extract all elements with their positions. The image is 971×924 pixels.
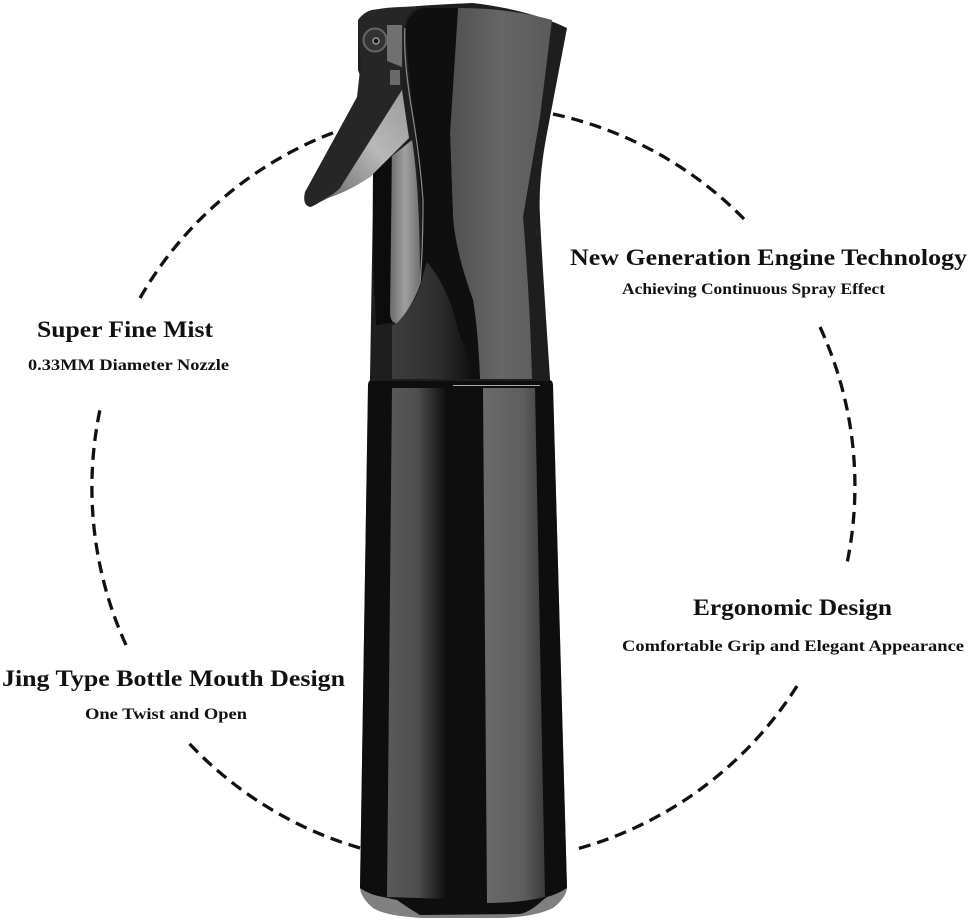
nozzle block bbox=[358, 7, 420, 70]
lower grey zone bbox=[392, 262, 475, 379]
callout: super fine mist bbox=[28, 317, 229, 374]
callout: ergonomic design bbox=[622, 595, 964, 655]
subheading: 0.33MM Diameter Nozzle bbox=[28, 357, 229, 374]
window bbox=[373, 157, 392, 325]
heading: Ergonomic Design bbox=[693, 595, 892, 621]
subheading: One Twist and Open bbox=[85, 706, 247, 723]
callout: new generation engine bbox=[570, 245, 967, 298]
sprayer head bbox=[304, 3, 567, 381]
trigger bbox=[304, 70, 410, 207]
dashed circle callout ring bbox=[92, 114, 855, 850]
subheading: Achieving Continuous Spray Effect bbox=[622, 281, 886, 298]
bottle body bbox=[360, 380, 567, 918]
heading: New Generation Engine Technology bbox=[570, 245, 967, 271]
spray bottle bbox=[304, 3, 567, 918]
dark centre band bbox=[405, 8, 480, 379]
nozzle ring bbox=[364, 28, 386, 52]
heading: Jing Type Bottle Mouth Design bbox=[2, 666, 345, 692]
highlight band bbox=[450, 8, 552, 379]
trigger silver strip bbox=[318, 90, 409, 201]
subheading: Comfortable Grip and Elegant Appearance bbox=[622, 638, 964, 655]
heading: Super Fine Mist bbox=[37, 317, 213, 343]
callout: jing type bottle mouth bbox=[2, 666, 345, 723]
seam line bbox=[396, 28, 423, 323]
